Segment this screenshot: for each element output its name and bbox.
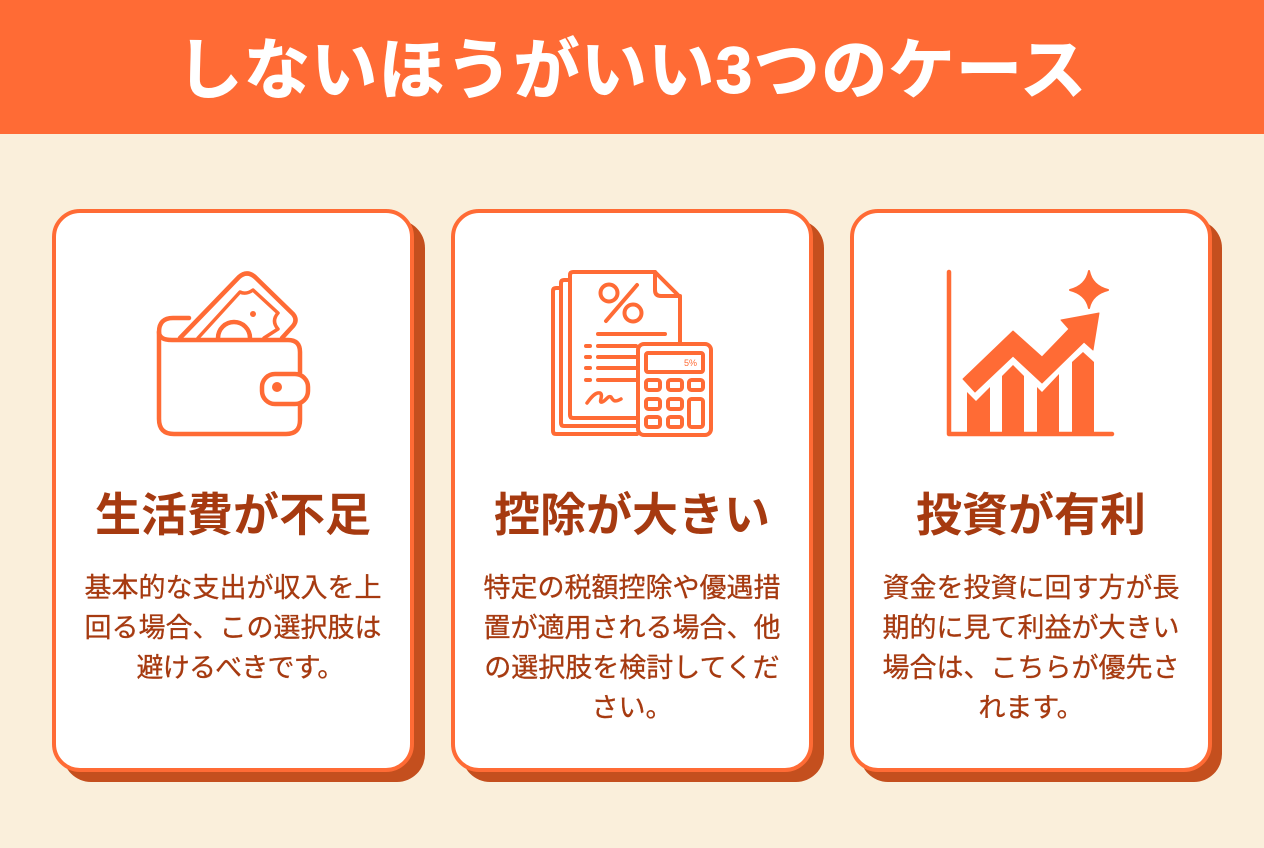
card body <box>451 209 813 772</box>
body text: れます。 <box>978 693 1084 723</box>
icon: wallet with banknote <box>159 274 308 434</box>
body text: 資金を投資に回す方が長 <box>882 573 1180 603</box>
body text <box>882 573 1180 723</box>
panel: large deductions <box>451 209 824 782</box>
body text: 回る場合、この選択肢は <box>84 613 382 643</box>
card shadow <box>462 220 824 782</box>
title banner <box>0 0 1264 134</box>
body text: の選択肢を検討してくだ <box>484 653 780 683</box>
body text: 避けるべきです。 <box>137 653 343 683</box>
card body <box>52 209 414 772</box>
body text: 置が適用される場合、他 <box>484 613 780 643</box>
icon: tax document and calculator: 5% <box>684 358 697 368</box>
body text: 期的に見て利益が大きい <box>882 613 1180 643</box>
card body <box>850 209 1212 772</box>
heading: 投資が有利 <box>916 489 1146 541</box>
card shadow <box>860 220 1222 782</box>
body text: さい。 <box>592 693 672 723</box>
body text: 場合は、こちらが優先さ <box>882 653 1180 683</box>
body text <box>484 573 780 723</box>
icon: growth chart with arrow and sparkle <box>949 271 1112 434</box>
body text: 基本的な支出が収入を上 <box>84 573 382 603</box>
heading: 控除が大きい <box>494 489 770 541</box>
title: しないほうがいい3つのケース <box>176 33 1088 107</box>
heading: 生活費が不足 <box>95 489 371 541</box>
panel: living costs shortage <box>52 209 425 782</box>
body text <box>84 573 382 683</box>
body text: 特定の税額控除や優遇措 <box>484 573 780 603</box>
panel: investing is advantageous <box>850 209 1222 782</box>
card shadow <box>63 220 425 782</box>
icon: tax document and calculator <box>553 272 711 435</box>
